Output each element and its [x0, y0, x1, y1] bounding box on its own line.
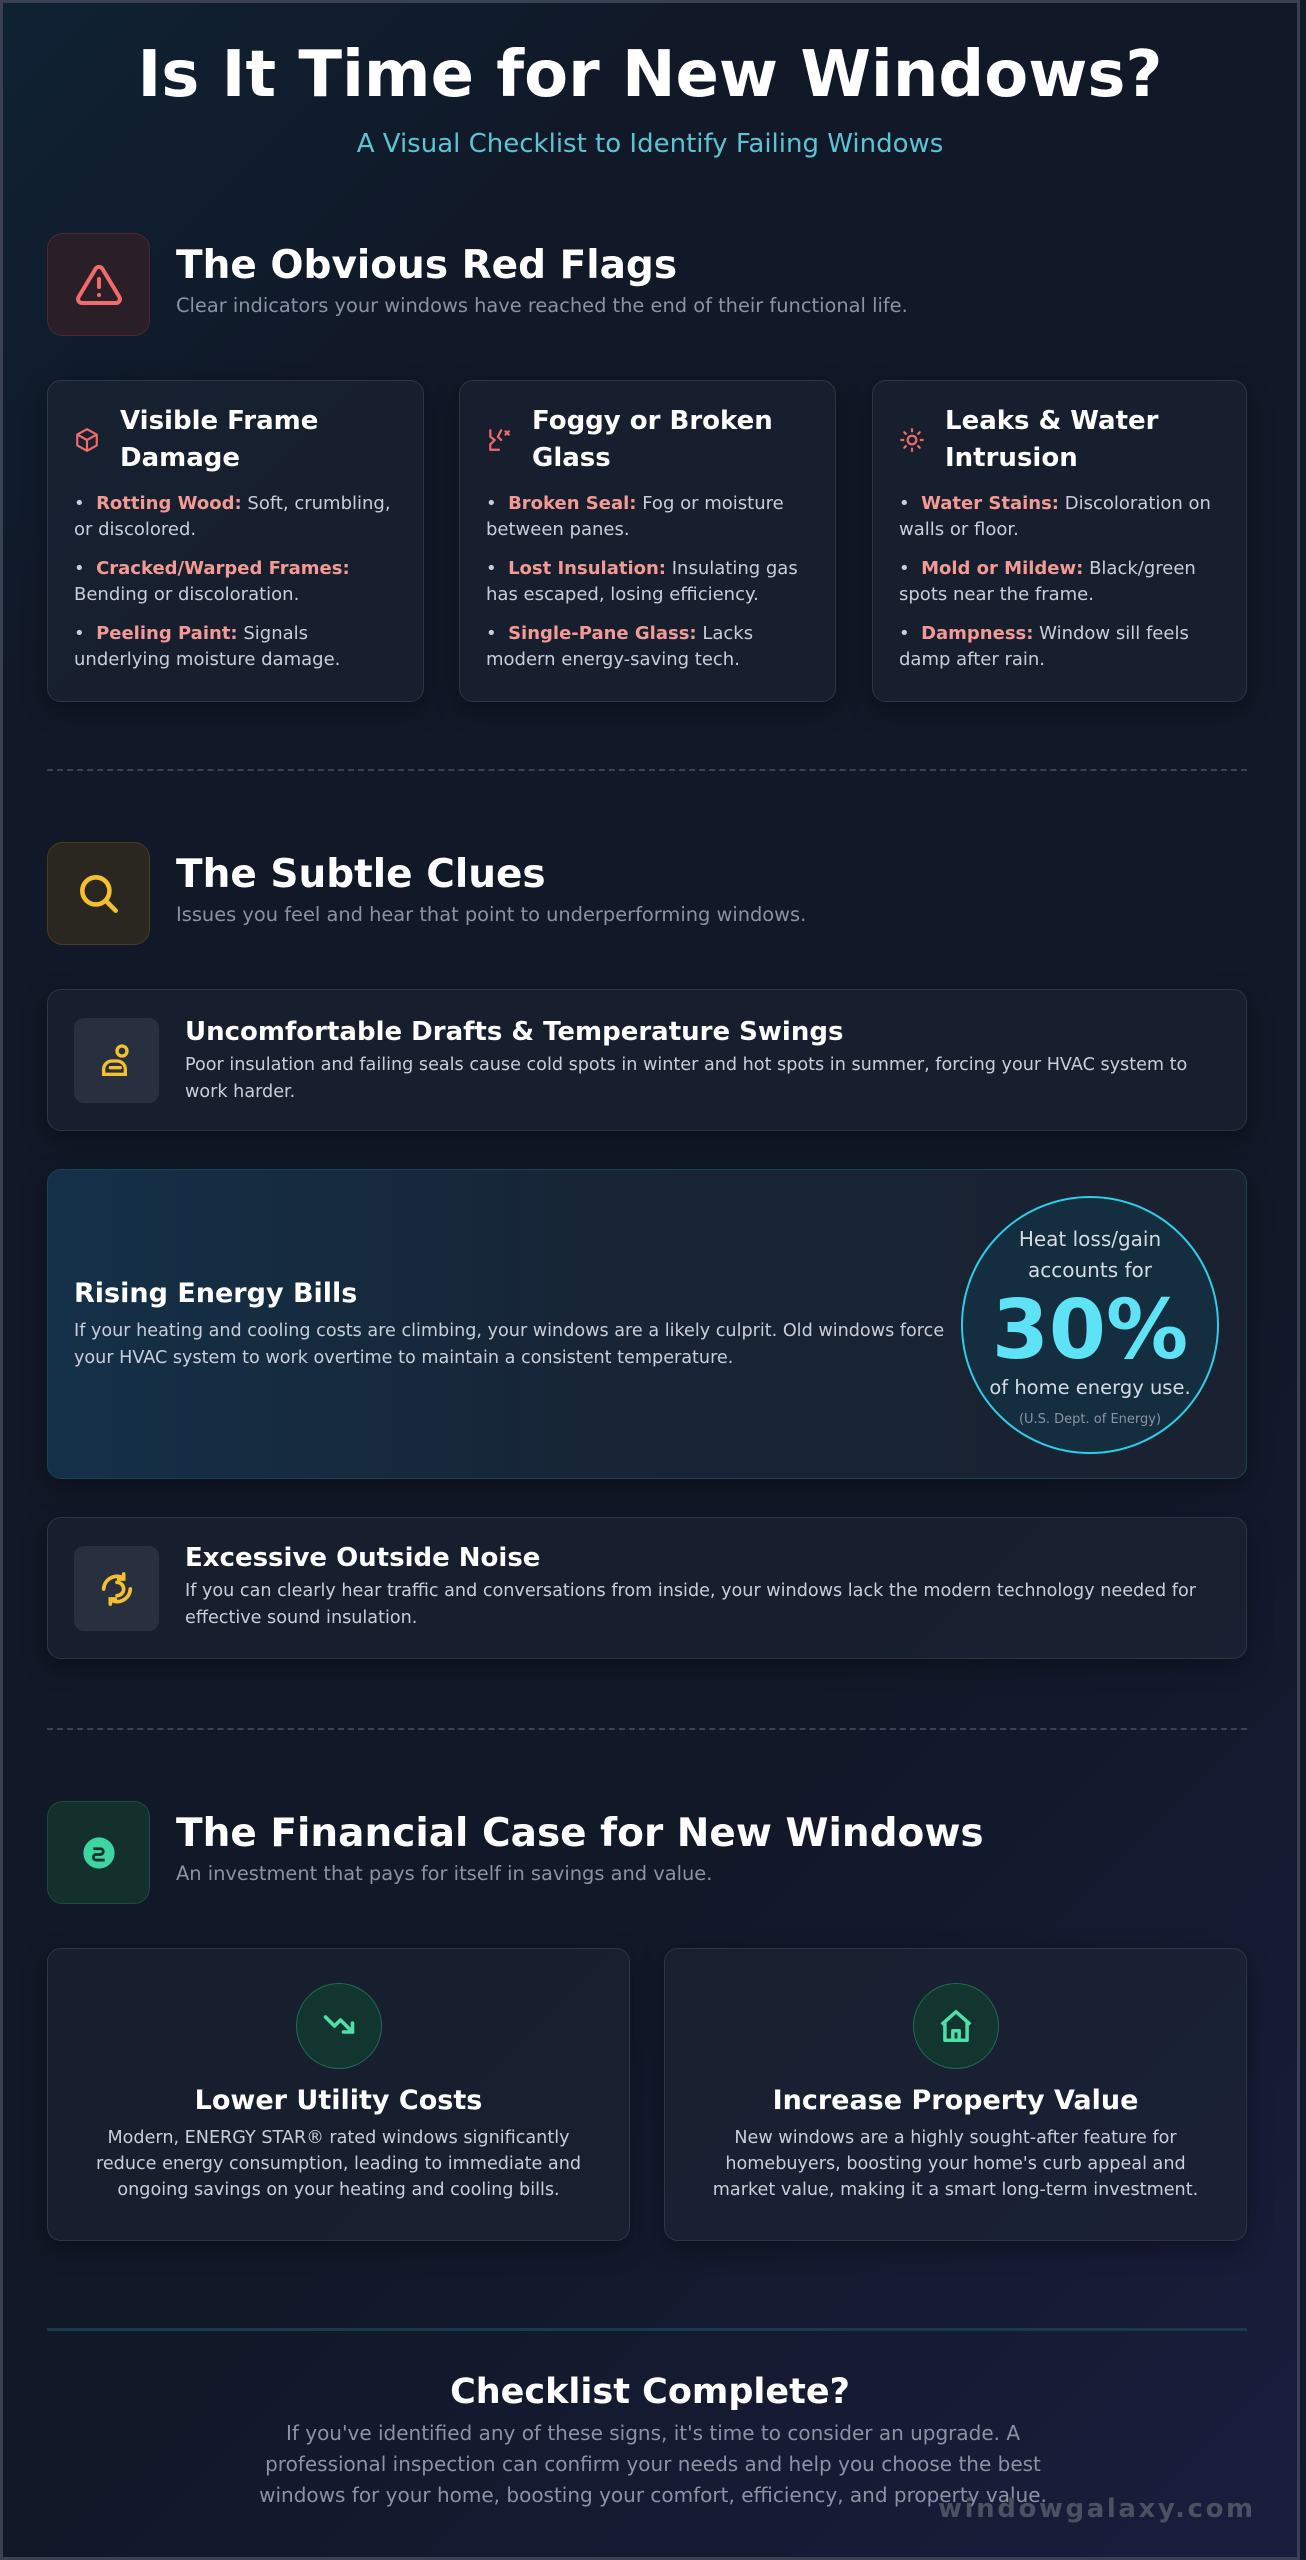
card title: [945, 406, 1158, 473]
icon: magnifier: [47, 842, 150, 945]
heading: The Obvious Red Flags: [176, 243, 677, 288]
card: drafts: [47, 989, 1247, 1131]
section 3 header: financial case: [47, 1801, 984, 1904]
bullets: [486, 493, 798, 670]
bullets: • Water Stains: Discoloration on walls or floor.: [899, 493, 1211, 540]
bullets: • Peeling Paint: Signals underlying moisture damage.: [74, 623, 340, 670]
heading: The Subtle Clues: [176, 852, 546, 897]
section 1 header: obvious red flags: [47, 233, 908, 336]
stat circle: 30%: accounts for: [1028, 1258, 1152, 1282]
stat circle: 30%: (U.S. Dept. of Energy): [1019, 1412, 1161, 1427]
bullets: [899, 493, 1211, 670]
icon: money: [47, 1801, 150, 1904]
bullets: • Broken Seal: Fog or moisture between panes.: [486, 493, 784, 540]
icon: person/draft: [74, 1018, 159, 1103]
title: Lower Utility Costs: [195, 2085, 482, 2116]
card title: [120, 406, 318, 473]
card title: [532, 406, 773, 473]
icon: cube: [76, 428, 98, 452]
bullets: • Single-Pane Glass: Lacks modern energy-saving tech.: [486, 623, 753, 670]
card: leaks & water intrusion: [872, 380, 1247, 702]
card title: Damage: [120, 443, 240, 473]
stat circle: 30%: [961, 1196, 1219, 1454]
card: visible frame damage: [47, 380, 424, 702]
subtitle: A Visual Checklist to Identify Failing Windows: [357, 129, 943, 159]
text: If your heating and cooling costs are climbing, your windows are a likely culprit. Old windows force your HVAC system to work overtime to maintain a consistent temperature.: [74, 1321, 944, 1368]
title: Increase Property Value: [773, 2085, 1138, 2116]
stat circle: 30%: 30%: [992, 1283, 1188, 1378]
heading: The Financial Case for New Windows: [176, 1811, 984, 1856]
conclusion heading: Checklist Complete?: [450, 2372, 850, 2412]
card title: Foggy or Broken: [532, 406, 773, 436]
section 2 header: subtle clues: [47, 842, 806, 945]
bullets: • Lost Insulation: Insulating gas has escaped, losing efficiency.: [486, 558, 798, 605]
subheading: Issues you feel and hear that point to underperforming windows.: [176, 903, 806, 926]
bullets: • Cracked/Warped Frames: Bending or discoloration.: [74, 558, 350, 605]
icon: ear/noise: [74, 1546, 159, 1631]
icon: house: [912, 1983, 998, 2069]
card: rising energy bills: [47, 1169, 1247, 1479]
card title: Leaks & Water: [945, 406, 1158, 436]
text: If you can clearly hear traffic and conversations from inside, your windows lack the modern technology needed for effective sound insulation.: [185, 1581, 1196, 1628]
card title: Glass: [532, 443, 611, 473]
card: increase property value: [664, 1948, 1247, 2241]
title: Uncomfortable Drafts & Temperature Swings: [185, 1017, 843, 1047]
watermark: windowgalaxy.com: [938, 2494, 1256, 2524]
conclusion text: If you've identified any of these signs, it's time to consider an upgrade. A professional inspection can confirm your needs and help you choose the best windows for your home, boosting your comfort, efficiency, and property value.: [259, 2421, 1047, 2507]
card title: Intrusion: [945, 443, 1078, 473]
subheading: An investment that pays for itself in savings and value.: [176, 1862, 712, 1885]
title: Is It Time for New Windows?: [137, 38, 1163, 112]
title: Rising Energy Bills: [74, 1278, 357, 1309]
stat circle: 30%: of home energy use.: [989, 1376, 1191, 1399]
title: Excessive Outside Noise: [185, 1543, 540, 1573]
icon: warning: [47, 233, 150, 336]
card: lower utility costs: [47, 1948, 630, 2241]
text: New windows are a highly sought-after feature for homebuyers, boosting your home's curb appeal and market value, making it a smart long-term investment.: [713, 2128, 1198, 2200]
icon: trend down: [296, 1983, 382, 2069]
card: foggy or broken glass: [459, 380, 836, 702]
bullets: [74, 493, 391, 670]
icon: broken glass: [489, 429, 510, 451]
bullets: • Rotting Wood: Soft, crumbling, or discolored.: [74, 493, 391, 540]
bullets: • Mold or Mildew: Black/green spots near the frame.: [899, 558, 1196, 605]
subheading: Clear indicators your windows have reached the end of their functional life.: [176, 294, 908, 317]
icon: sun/drop: [900, 428, 924, 452]
text: Modern, ENERGY STAR® rated windows significantly reduce energy consumption, leading to immediate and ongoing savings on your heating and cooling bills.: [96, 2128, 581, 2200]
bullets: • Dampness: Window sill feels damp after rain.: [899, 623, 1189, 670]
text: Poor insulation and failing seals cause cold spots in winter and hot spots in summer, forcing your HVAC system to work harder.: [185, 1055, 1187, 1102]
stat circle: 30%: Heat loss/gain: [1019, 1227, 1161, 1251]
card: excessive noise: [47, 1517, 1247, 1659]
card title: Visible Frame: [120, 406, 318, 436]
